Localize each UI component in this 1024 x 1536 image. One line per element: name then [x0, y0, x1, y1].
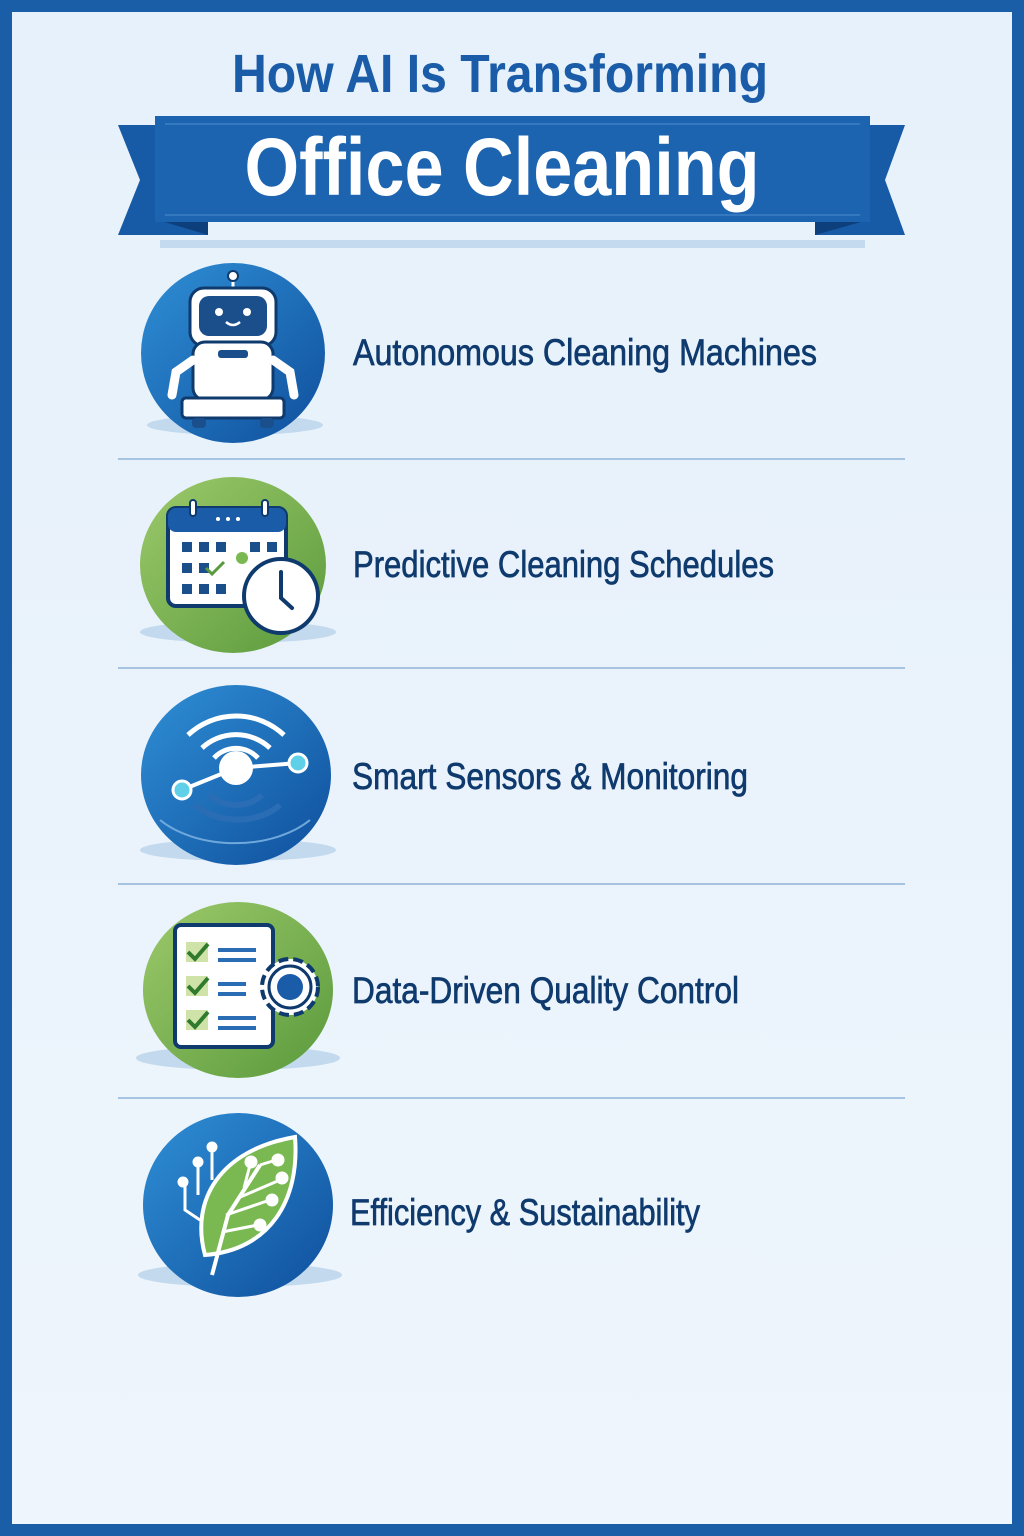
item 1: autonomous cleaning machines: Autonomous Cleaning Machines: [353, 332, 817, 373]
item 4: data-driven quality control: Data-Driven Quality Control: [352, 970, 739, 1011]
banner text: Office Cleaning: [244, 122, 760, 213]
item 3: smart sensors: [140, 685, 748, 865]
item 1: autonomous cleaning machines: [141, 263, 817, 443]
item 4: data-driven quality control: [136, 902, 739, 1078]
item 2: predictive cleaning schedules: [140, 477, 774, 653]
item 3: smart sensors: Smart Sensors & Monitoring: [352, 756, 748, 797]
icon: calendar and clock: [140, 477, 326, 653]
title: How AI Is Transforming: [232, 44, 768, 104]
item 5: efficiency and sustainability: Efficiency & Sustainability: [350, 1192, 700, 1233]
icon: leaf with circuit: [143, 1113, 333, 1297]
item 2: predictive cleaning schedules: Predictive Cleaning Schedules: [353, 544, 774, 585]
banner: [118, 116, 905, 248]
icon: checklist with gear: [143, 902, 333, 1078]
icon: robot: [141, 263, 325, 443]
item 5: efficiency and sustainability: [138, 1113, 700, 1297]
icon: sensor waves: [141, 685, 331, 865]
